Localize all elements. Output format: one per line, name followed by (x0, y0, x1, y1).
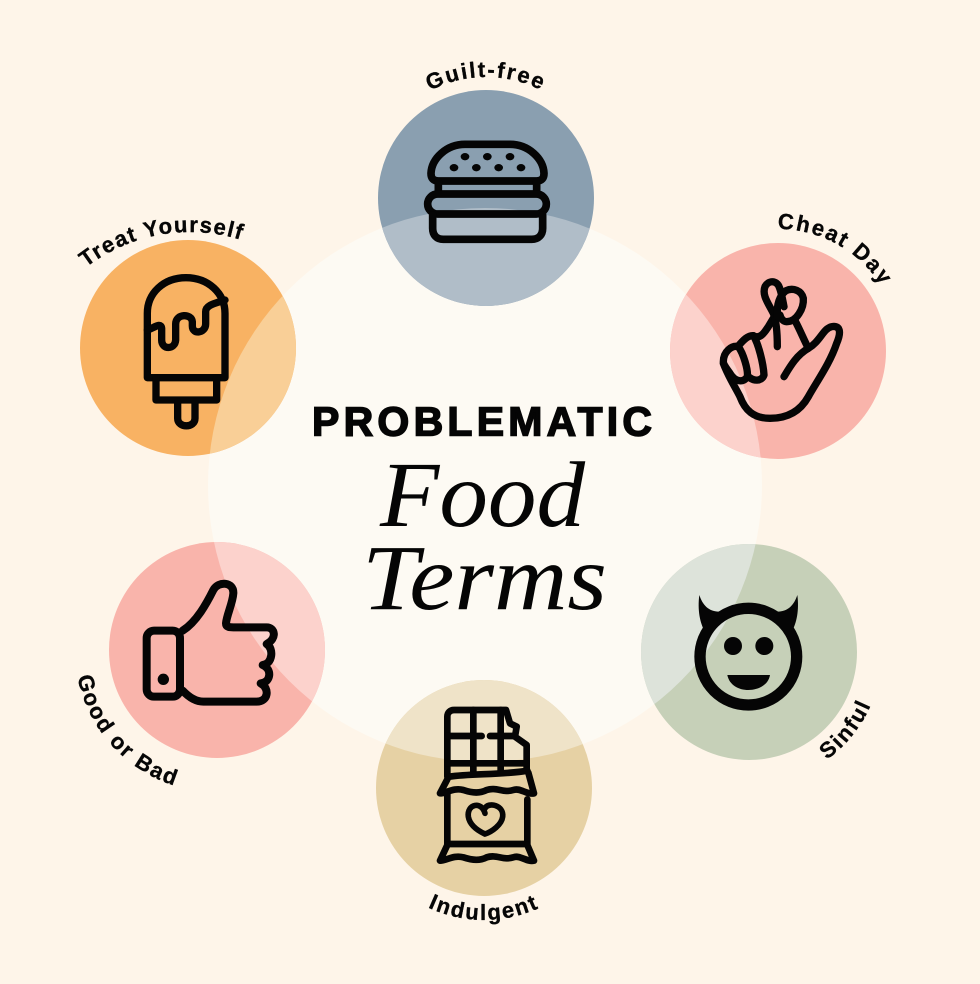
panel: Good or Bad (78, 542, 325, 786)
panel: Sinful (641, 544, 870, 760)
panel: Indulgent (376, 680, 592, 924)
panel: Guilt-free (378, 62, 594, 306)
infographic: problematic food terms (77, 62, 891, 924)
label: Cheat Day: Cheat Day (778, 214, 891, 282)
label: Indulgent: Indulgent (428, 894, 538, 924)
icon: thumbs up (147, 584, 274, 702)
heading: Terms: Terms (362, 527, 607, 630)
label: Good or Bad: Good or Bad (78, 675, 178, 786)
label: Guilt-free: Guilt-free (426, 62, 544, 88)
heading: PROBLEMATIC: PROBLEMATIC (312, 398, 652, 444)
icon: burger (428, 144, 546, 239)
icon: devil face (699, 595, 798, 705)
title: Problematic Food Terms (312, 398, 652, 630)
panel: Treat Yourself (77, 220, 296, 456)
panel: Cheat Day (670, 214, 891, 459)
icon: popsicle (147, 278, 225, 426)
label: Sinful: Sinful (820, 700, 870, 758)
central circle (208, 208, 762, 762)
icon: chocolate bar (440, 710, 534, 861)
icon: crossed fingers (723, 282, 839, 418)
label: Treat Yourself: Treat Yourself (77, 220, 245, 265)
heading: Food: Food (379, 444, 586, 547)
